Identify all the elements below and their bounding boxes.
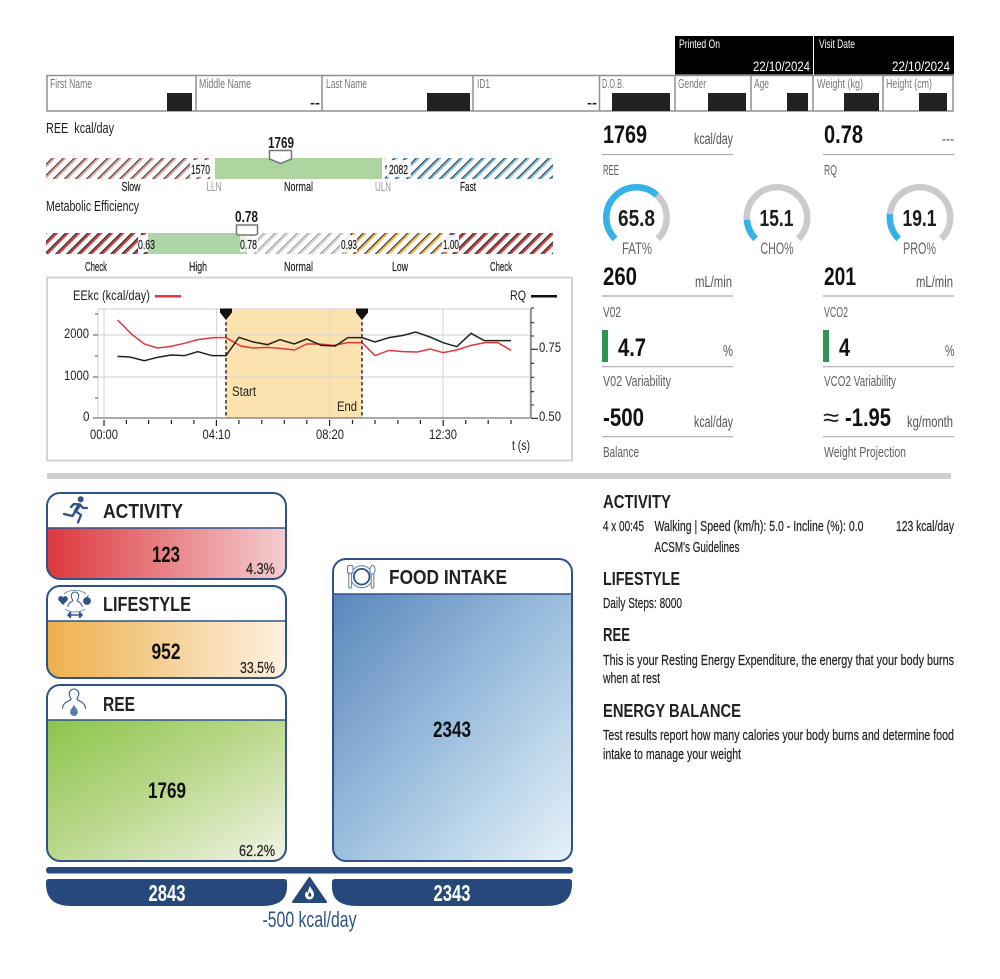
REE range labels xyxy=(122,179,476,194)
selected interval band xyxy=(226,309,362,418)
efficiency hatched range bar xyxy=(46,233,553,254)
REE description: REE xyxy=(603,625,630,645)
explanatory text column xyxy=(602,492,955,763)
axis labels: 12:30 xyxy=(429,427,457,442)
net balance value: -500 kcal/day xyxy=(262,907,356,932)
icon: person with drop xyxy=(62,689,86,716)
metric: weight projection: kg/month xyxy=(907,414,953,431)
patient fields row: First Name xyxy=(50,76,92,91)
axis labels: 08:20 xyxy=(316,427,344,442)
REE description: when at rest xyxy=(602,671,660,687)
efficiency hatched range bar: 0.63 xyxy=(138,237,155,252)
activity description: ACTIVITY xyxy=(603,492,671,512)
icon: triangle with flame xyxy=(293,878,326,902)
patient fields row: Weight (kg) xyxy=(817,76,863,91)
REE marker 1769 xyxy=(268,135,294,164)
icon: lifestyle person with heart, apple, dumbbell xyxy=(58,590,91,618)
metrics panel xyxy=(602,121,955,461)
metric: REE: REE xyxy=(603,162,619,179)
line chart: EEkc and RQ over time xyxy=(47,278,572,460)
axis labels: 04:10 xyxy=(202,427,230,442)
efficiency marker 0.78: 0.78 xyxy=(235,209,258,226)
metric: VCO2: mL/min xyxy=(916,274,953,291)
gauge: CHO%: 15.1 xyxy=(760,205,794,231)
metric: REE: kcal/day xyxy=(694,131,733,148)
metric: weight projection: ≈ xyxy=(823,404,839,432)
metric: VO2 variability xyxy=(602,330,733,390)
metric: VO2: mL/min xyxy=(695,274,732,291)
REE range labels: Fast xyxy=(460,179,476,194)
metric: VCO2: VCO2 xyxy=(824,304,848,321)
visit date box: Visit Date xyxy=(819,37,855,51)
patient fields row: -- xyxy=(310,95,320,110)
REE range gauge xyxy=(46,121,553,194)
REE range labels: ULN xyxy=(375,179,391,194)
metric: VCO2: 201 xyxy=(824,263,856,291)
energy balance description: ENERGY BALANCE xyxy=(603,701,741,721)
start and end markers: End xyxy=(337,399,357,414)
balance beam xyxy=(46,867,573,874)
efficiency range labels: Check xyxy=(490,259,512,274)
metric: balance xyxy=(602,404,733,461)
REE description xyxy=(602,625,954,687)
patient fields row: -- xyxy=(587,95,597,110)
gauge: FAT%: 65.8 xyxy=(618,205,655,231)
printed on box xyxy=(675,36,813,74)
start and end markers xyxy=(220,308,368,418)
printed on box: Printed On xyxy=(679,37,720,51)
card: activity: 123 xyxy=(152,542,180,567)
chart legend xyxy=(73,288,557,303)
activity description: ACSM's Guidelines xyxy=(654,540,740,556)
gauge: PRO%: PRO% xyxy=(903,239,936,258)
axis labels: 0 xyxy=(83,409,90,424)
patient fields row: Age xyxy=(754,76,769,91)
icon: plate with cutlery xyxy=(348,566,375,588)
total expenditure base xyxy=(46,879,287,906)
activity description xyxy=(603,492,955,556)
gauge: FAT%: FAT% xyxy=(622,239,652,258)
metric: balance: -500 xyxy=(603,404,644,432)
gauge: PRO%: 19.1 xyxy=(902,205,937,231)
card: REE xyxy=(47,685,286,861)
efficiency range labels: High xyxy=(189,259,207,274)
axis labels: 0.50 xyxy=(539,409,561,424)
metric: RQ: --- xyxy=(942,131,954,148)
efficiency range labels xyxy=(85,259,512,274)
patient fields row xyxy=(47,75,953,111)
food intake base: 2343 xyxy=(434,880,470,906)
chart legend: RQ xyxy=(510,288,526,303)
efficiency range labels: Low xyxy=(392,259,408,274)
gauge: CHO% xyxy=(747,187,807,258)
lifestyle description xyxy=(603,569,682,612)
activity description: 4 x 00:45 xyxy=(603,519,644,535)
card: activity: ACTIVITY xyxy=(103,501,184,523)
card: activity xyxy=(47,493,286,579)
metric: REE: 1769 xyxy=(603,121,647,149)
efficiency hatched range bar: 1.00 xyxy=(443,237,459,252)
header: dates and patient fields xyxy=(47,36,954,111)
axis labels: t (s) xyxy=(512,438,530,453)
card: food intake: FOOD INTAKE xyxy=(389,567,507,589)
axis labels xyxy=(64,326,561,453)
metric: balance: kcal/day xyxy=(694,414,733,431)
efficiency range labels: Normal xyxy=(284,259,313,274)
card: food intake: 2343 xyxy=(433,717,471,742)
axis labels: 0.75 xyxy=(539,340,561,355)
card: food intake xyxy=(333,559,572,861)
metric: weight projection: Weight Projection xyxy=(824,444,906,461)
card: REE: REE xyxy=(103,694,135,716)
food intake base xyxy=(332,879,572,906)
EEkc red line xyxy=(117,320,511,356)
metric: RQ xyxy=(823,121,954,179)
REE hatched range bar xyxy=(46,158,553,179)
metric: weight projection: -1.95 xyxy=(845,404,891,432)
energy balance description xyxy=(603,701,954,763)
total expenditure base: 2843 xyxy=(148,880,186,906)
energy balance scale xyxy=(46,867,573,932)
metric: VCO2 xyxy=(823,263,954,321)
card: REE: 62.2% xyxy=(239,843,275,860)
efficiency hatched range bar: 0.93 xyxy=(341,237,357,252)
card: lifestyle: 33.5% xyxy=(240,660,275,677)
visit date box: 22/10/2024 xyxy=(892,58,950,74)
efficiency range labels: Check xyxy=(85,259,107,274)
metric: REE xyxy=(602,121,733,179)
axis labels: 2000 xyxy=(64,326,89,341)
activity description: Walking | Speed (km/h): 5.0 - Incline (%): 0.0 xyxy=(654,519,864,535)
metabolic efficiency gauge xyxy=(46,199,553,274)
metric: VO2 variability: % xyxy=(723,343,733,360)
gauge: PRO% xyxy=(890,187,950,258)
card: REE: 1769 xyxy=(148,778,186,803)
gauge: FAT% xyxy=(606,187,667,258)
metric: VO2 variability: V02 Variability xyxy=(603,373,671,390)
metric: RQ: 0.78 xyxy=(824,121,863,149)
patient fields row: Gender xyxy=(678,76,706,91)
chart legend: EEkc (kcal/day) xyxy=(73,288,150,303)
gauge: CHO%: CHO% xyxy=(760,239,794,258)
visit date box xyxy=(814,36,954,74)
axes and ticks xyxy=(93,308,538,426)
REE marker 1769: 1769 xyxy=(268,135,294,152)
patient fields row: D.O.B. xyxy=(602,76,624,91)
metric: VCO2 variability: % xyxy=(945,343,955,360)
metabolic efficiency heading: Metabolic Efficiency xyxy=(46,199,140,215)
patient fields row: ID1 xyxy=(477,76,490,91)
card: lifestyle: LIFESTYLE xyxy=(103,594,191,616)
metric: VCO2 variability xyxy=(823,330,955,390)
metric: VO2: V02 xyxy=(603,304,621,321)
REE hatched range bar: 1570 xyxy=(191,162,210,177)
card: lifestyle: 952 xyxy=(152,639,180,664)
card: lifestyle xyxy=(47,586,286,678)
lifestyle description: Daily Steps: 8000 xyxy=(603,596,682,612)
card: activity: 4.3% xyxy=(246,561,275,578)
metric: VO2 xyxy=(602,263,733,321)
metric: VCO2 variability: 4 xyxy=(839,334,850,362)
metric: RQ: RQ xyxy=(824,162,837,179)
energy balance description: intake to manage your weight xyxy=(603,747,741,763)
metric: VO2 variability: 4.7 xyxy=(618,334,646,362)
metric: weight projection xyxy=(823,404,954,461)
patient fields row: Height (cm) xyxy=(886,76,932,91)
REE range labels: LLN xyxy=(206,179,222,194)
REE range labels: Slow xyxy=(122,179,141,194)
icon: runner xyxy=(64,496,87,522)
lifestyle description: LIFESTYLE xyxy=(603,569,680,589)
metric: VCO2 variability: VCO2 Variability xyxy=(824,373,896,390)
patient fields row: Middle Name xyxy=(199,76,251,91)
printed on box: 22/10/2024 xyxy=(753,58,810,74)
patient fields row: Last Name xyxy=(326,76,367,91)
REE range labels: Normal xyxy=(284,179,313,194)
RQ black line xyxy=(117,332,511,361)
axis labels: 00:00 xyxy=(90,427,118,442)
efficiency hatched range bar: 0.78 xyxy=(240,237,257,252)
metric: balance: Balance xyxy=(603,444,639,461)
metric: VO2: 260 xyxy=(603,263,637,291)
REE heading: REE kcal/day xyxy=(46,121,115,137)
activity description: 123 kcal/day xyxy=(896,519,955,535)
REE hatched range bar: 2082 xyxy=(389,162,408,177)
efficiency marker 0.78 xyxy=(235,209,258,235)
axis labels: 1000 xyxy=(64,368,89,383)
start and end markers: Start xyxy=(232,384,256,399)
